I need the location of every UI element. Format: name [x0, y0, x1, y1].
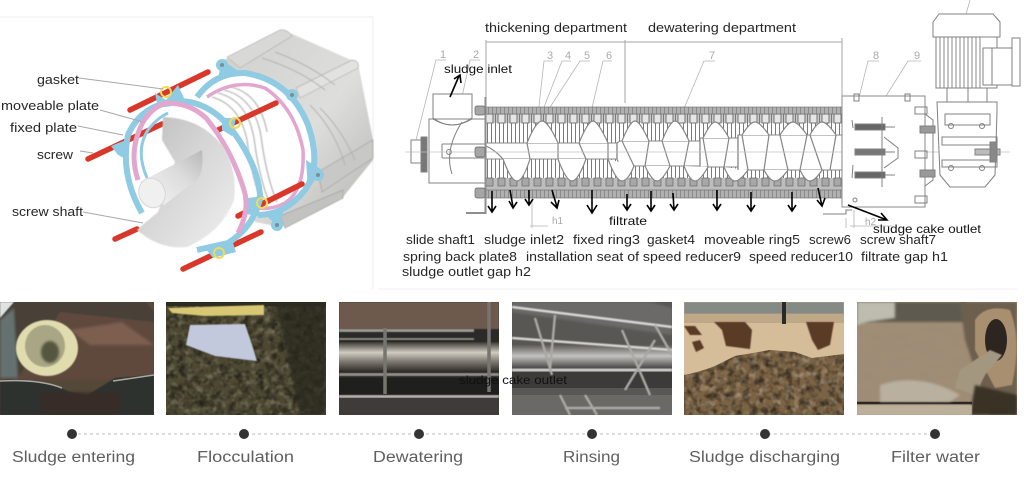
parts legend: [402, 232, 948, 279]
part numbers and leaders: 1: [440, 49, 446, 61]
label: sludge cake outlet: sludge cake outlet: [873, 222, 982, 236]
label: filtrate: filtrate: [609, 214, 647, 228]
overlay text: sludge cake outlet: sludge cake outlet: [459, 373, 568, 387]
parts legend: spring back plate8: [403, 249, 517, 264]
parts legend: screw shaft7: [860, 232, 936, 247]
dimension lines: [486, 38, 842, 107]
speed reducer: [920, 102, 1000, 187]
parts legend: slide shaft1: [406, 232, 475, 247]
cylinder body: [220, 30, 373, 228]
part numbers and leaders: 8: [873, 50, 879, 62]
photo: filter water: [857, 302, 1017, 415]
part numbers and leaders: 6: [606, 50, 612, 62]
photo: rinsing: [512, 302, 672, 415]
panel: exploded screw assembly diagram: [1, 30, 373, 269]
heading: dewatering department: dewatering department: [648, 20, 796, 35]
screw chamber with comb plates: [485, 107, 842, 198]
step label: sludge discharging: Sludge discharging: [689, 449, 840, 466]
screw flights: [503, 121, 836, 181]
part numbers and leaders: 7: [709, 50, 715, 62]
label: screw: screw: [37, 147, 74, 162]
screw shaft tube: [135, 150, 202, 212]
back moveable pink ring: [207, 85, 303, 208]
rods behind front ring: [88, 72, 302, 269]
panel: dewatering machine cross-section drawing: [402, 0, 1020, 279]
flight diagonals across shaft: [486, 135, 836, 170]
centre line: [405, 151, 1010, 153]
parts legend: gasket4: [647, 232, 695, 247]
end plate and bracket: [466, 97, 486, 213]
parts legend: speed reducer10: [749, 249, 853, 264]
step label: sludge entering: Sludge entering: [12, 449, 135, 466]
heading: thickening department: thickening department: [485, 20, 627, 35]
arrow: sludge cake outlet: [848, 205, 887, 220]
step label: filter water: Filter water: [891, 449, 980, 466]
part numbers and leaders: 3: [547, 50, 553, 62]
dimension h1 and h2: h2: [865, 217, 877, 228]
dimension h1 and h2: [530, 200, 892, 228]
outlet box: [823, 94, 927, 214]
screw blade disc: [137, 117, 235, 247]
part numbers and leaders: 9: [914, 50, 920, 62]
step dots: [67, 429, 940, 439]
step label: rinsing: Rinsing: [563, 449, 620, 466]
parts legend: sludge outlet gap h2: [402, 264, 531, 279]
front fixed blue ring: [111, 85, 264, 258]
part numbers and leaders: [416, 0, 970, 140]
arrows: filtrate down: [488, 188, 825, 213]
step label: dewatering: Dewatering: [373, 449, 463, 466]
label: sludge inlet: sludge inlet: [444, 62, 513, 76]
left inlet housing: [411, 94, 485, 183]
parts legend: moveable ring5: [704, 232, 800, 247]
dimension h1 and h2: h1: [552, 216, 564, 227]
parts legend: screw6: [809, 232, 851, 247]
top tie rod: [485, 107, 842, 114]
photo: dewatering: [339, 302, 499, 415]
tie rod bolts: [475, 106, 853, 198]
parts legend: sludge inlet2: [484, 232, 564, 247]
part numbers and leaders: 5: [584, 50, 590, 62]
screw shaft stages: [486, 135, 842, 170]
photo: flocculation: [166, 302, 326, 415]
parts legend: fixed ring3: [573, 232, 640, 247]
bottom tie rod: [485, 190, 842, 198]
part numbers and leaders: 2: [473, 49, 479, 61]
process timeline: [12, 429, 980, 466]
rubble pile: [684, 345, 844, 415]
label: fixed plate: fixed plate: [10, 120, 77, 135]
photo: sludge discharging: [684, 302, 844, 415]
label: gasket: gasket: [37, 72, 79, 87]
back ring interior: [197, 73, 314, 215]
part numbers and leaders: 4: [565, 50, 571, 62]
label: screw shaft: screw shaft: [12, 204, 83, 219]
photo: sludge entering: [0, 302, 154, 415]
step label: flocculation: Flocculation: [197, 449, 294, 466]
back fixed blue ring: [197, 59, 324, 231]
parts legend: installation seat of speed reducer9: [526, 249, 741, 264]
inner blue arc: [141, 113, 168, 178]
label: moveable plate: moveable plate: [1, 98, 99, 113]
parts legend: filtrate gap h1: [861, 249, 948, 264]
motor: [933, 14, 1020, 105]
arrow: sludge inlet up: [450, 75, 461, 97]
leader lines: [78, 78, 163, 223]
front pink plate: [134, 103, 246, 233]
gaskets: [161, 87, 267, 258]
